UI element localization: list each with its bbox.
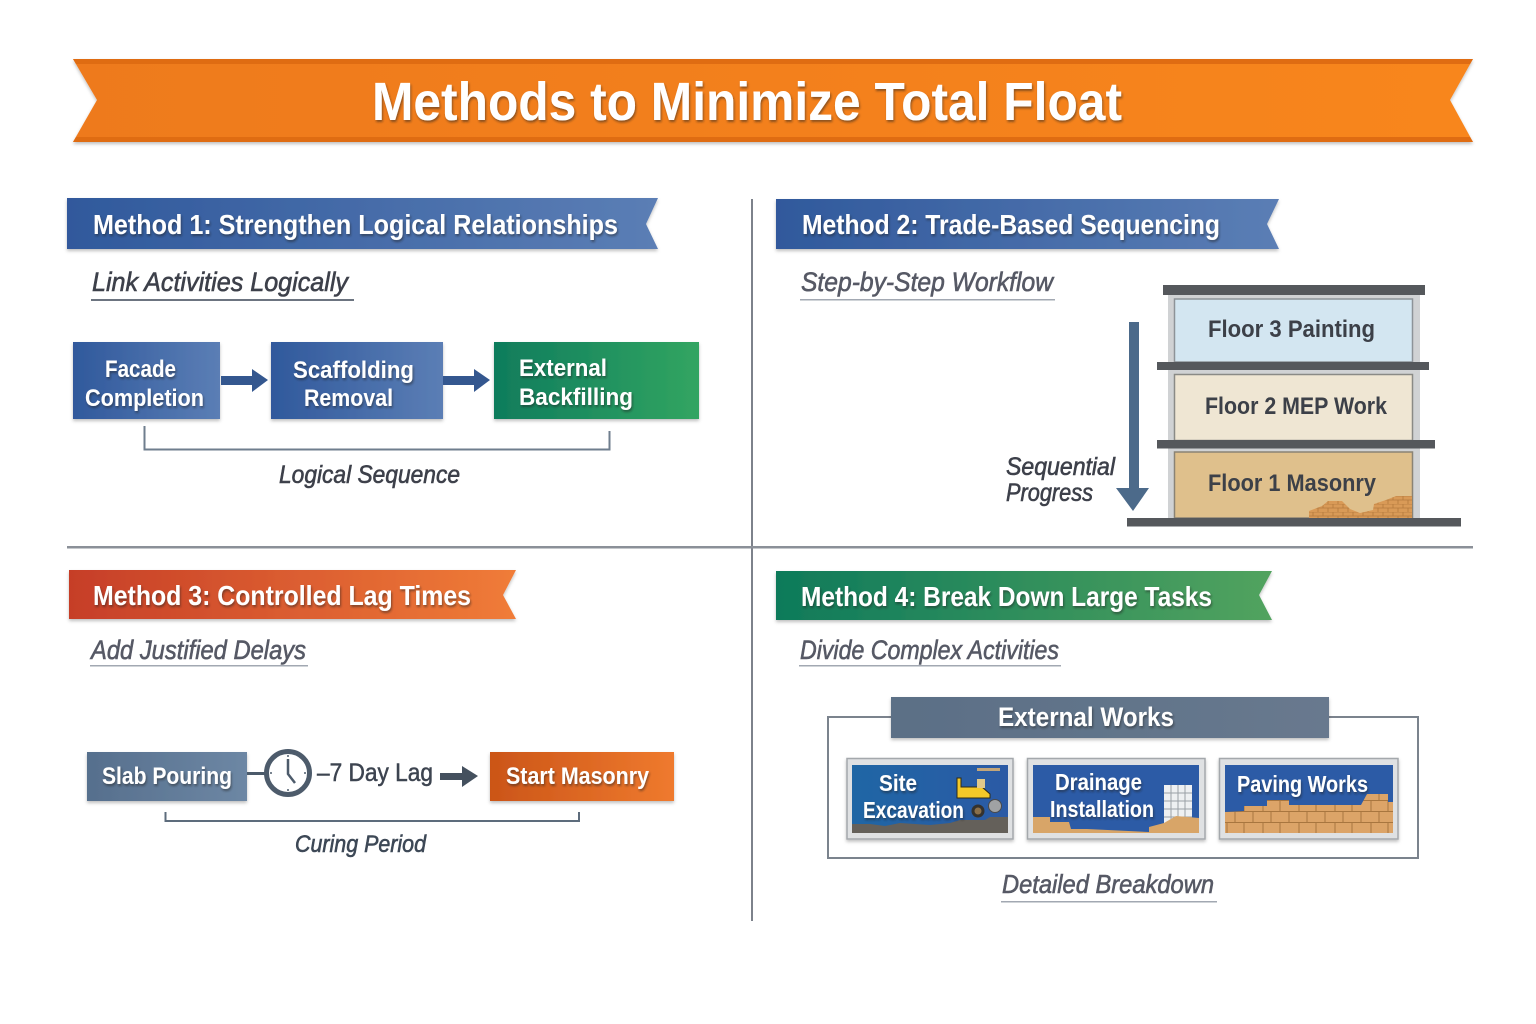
icon: clock — [266, 752, 310, 794]
tile: site excavation: Excavation — [863, 797, 964, 823]
floor 3 painting: Floor 3 Painting — [1208, 316, 1375, 343]
vertical divider — [751, 199, 753, 921]
floor 1 masonry: Floor 1 Masonry — [1208, 470, 1377, 497]
floor 1 masonry — [1174, 452, 1412, 518]
panel: method 1 — [67, 198, 699, 489]
caption: detailed breakdown: Detailed Breakdown — [1002, 869, 1214, 899]
arrow: lag to masonry — [440, 766, 478, 787]
method 1 subtitle: Link Activities Logically — [92, 267, 349, 297]
connector line — [247, 772, 265, 775]
method 2 heading — [776, 199, 1279, 249]
box: scaffolding removal: Removal — [304, 385, 393, 412]
box: facade completion: Completion — [85, 385, 204, 412]
roof slab — [1163, 285, 1425, 295]
bracket: logical sequence — [144, 426, 610, 450]
floor 2 mep work: Floor 2 MEP Work — [1205, 393, 1388, 420]
slab above floor 2 — [1157, 362, 1429, 370]
caption: curing period: Curing Period — [295, 831, 427, 858]
panel: method 2 — [776, 199, 1461, 526]
method 2 heading: Method 2: Trade-Based Sequencing — [802, 209, 1220, 240]
panel: method 4 — [776, 571, 1418, 902]
building diagram — [1127, 285, 1461, 526]
method 4 heading: Method 4: Break Down Large Tasks — [801, 581, 1212, 612]
box: facade completion — [73, 342, 220, 419]
header: external works: External Works — [998, 702, 1174, 732]
method 2 subtitle: Step-by-Step Workflow — [801, 267, 1054, 297]
bracket: curing period — [166, 812, 579, 821]
tile: drainage installation: Installation — [1050, 796, 1154, 822]
horizontal divider — [67, 546, 1473, 548]
box: slab pouring — [87, 752, 247, 801]
box: external backfilling — [494, 342, 699, 419]
slab above floor 1 — [1157, 440, 1435, 448]
icon: pipe grid — [1164, 785, 1192, 823]
method 1 heading — [67, 198, 658, 249]
title banner — [73, 59, 1473, 142]
box: facade completion: Facade — [105, 356, 176, 383]
arrow: facade to scaffolding — [221, 369, 268, 392]
floor 3 painting — [1174, 299, 1412, 362]
tile: drainage installation — [1028, 758, 1205, 839]
box: start masonry — [490, 752, 674, 801]
method 3 heading: Method 3: Controlled Lag Times — [93, 580, 471, 611]
tile: paving works — [1220, 758, 1398, 839]
label: 7 day lag: –7 Day Lag — [317, 759, 433, 787]
tile: site excavation: Site — [879, 770, 917, 796]
method 3 heading — [69, 570, 516, 619]
method 4 subtitle: Divide Complex Activities — [800, 635, 1059, 665]
box: scaffolding removal — [271, 342, 443, 419]
box: external backfilling: Backfilling — [519, 384, 633, 411]
arrow: sequential progress — [1116, 322, 1149, 511]
method 3 subtitle: Add Justified Delays — [89, 635, 306, 665]
frame: external works — [828, 717, 1418, 858]
tile: drainage installation: Drainage — [1055, 769, 1142, 795]
tile: site excavation — [847, 758, 1013, 839]
caption: logical sequence: Logical Sequence — [279, 461, 460, 489]
box: start masonry: Start Masonry — [506, 763, 650, 790]
caption: sequential progress: Progress — [1006, 479, 1093, 507]
box: scaffolding removal: Scaffolding — [293, 357, 414, 384]
method 1 heading: Method 1: Strengthen Logical Relationships — [93, 209, 618, 240]
floor 2 mep work — [1174, 374, 1412, 440]
panel: method 3 — [69, 570, 674, 858]
icon: excavator — [957, 768, 1002, 816]
ground slab — [1127, 518, 1461, 526]
title: Methods to Minimize Total Float — [372, 72, 1122, 132]
caption: sequential progress — [1006, 453, 1116, 507]
method 4 heading — [776, 571, 1272, 620]
caption: sequential progress: Sequential — [1006, 453, 1116, 481]
tile: paving works: Paving Works — [1237, 771, 1368, 797]
arrow: scaffolding to backfilling — [443, 369, 490, 392]
box: external backfilling: External — [519, 355, 607, 382]
header: external works — [891, 697, 1329, 738]
box: slab pouring: Slab Pouring — [102, 763, 232, 790]
